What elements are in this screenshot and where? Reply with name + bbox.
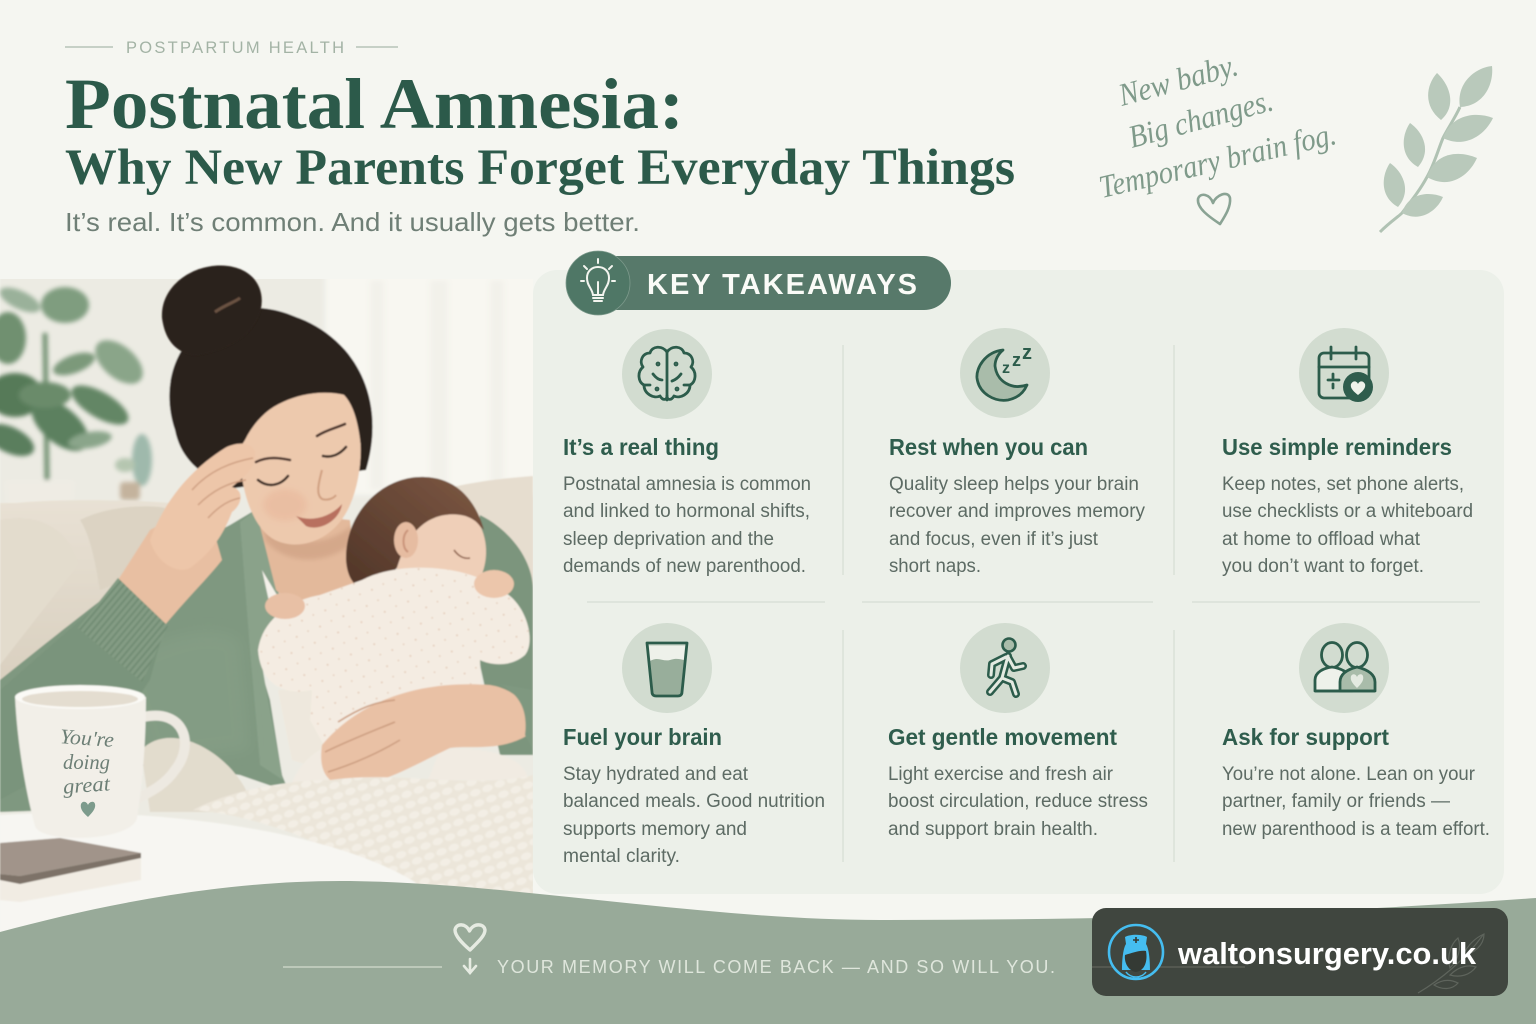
icon: small sprout arrow (464, 959, 476, 973)
icon: moon and zzz (977, 342, 1032, 400)
icon: moon and zzz: z (1012, 350, 1021, 370)
takeaway: Rest when you can: short naps. (889, 556, 981, 577)
takeaway: Ask for support: You’re not alone. Lean on your (1222, 764, 1476, 785)
heading pill (566, 251, 951, 315)
cardigan body (0, 506, 289, 812)
icon: brain (639, 347, 695, 400)
icon: two people (1315, 642, 1375, 691)
takeaway: Rest when you can: Rest when you can (889, 434, 1088, 460)
neck and chest (260, 518, 354, 600)
baby onesie (257, 567, 531, 670)
footer message (283, 925, 1055, 977)
takeaway: Fuel your brain: balanced meals. Good nutrition (563, 791, 825, 812)
handwritten note: New baby. (1114, 46, 1242, 113)
takeaway: Use simple reminders: Keep notes, set phone alerts, (1222, 474, 1464, 495)
takeaway: Use simple reminders: use checklists or a whiteboard (1222, 501, 1473, 522)
mug text (59, 724, 115, 817)
takeaway: Ask for support (1222, 623, 1490, 840)
icon: glass of water (647, 643, 687, 696)
takeaway: Fuel your brain: Fuel your brain (563, 724, 722, 750)
takeaway: Ask for support: Ask for support (1222, 724, 1389, 750)
takeaway: Ask for support: new parenthood is a team effort. (1222, 819, 1490, 840)
title: Postnatal Amnesia: (65, 64, 684, 144)
icon: moon and zzz: z (1002, 360, 1010, 377)
handwritten note: Big changes. (1124, 82, 1277, 155)
takeaway: Get gentle movement: Get gentle movement (888, 724, 1117, 750)
mug text: doing (63, 750, 110, 774)
photo: mother holding sleeping baby (0, 266, 540, 950)
mug handle (135, 716, 185, 800)
baby legs (500, 754, 502, 756)
takeaway: Rest when you can: Quality sleep helps your brain (889, 474, 1139, 495)
takeaway: Fuel your brain (563, 623, 825, 867)
handwritten note (1095, 46, 1339, 224)
takeaway: Use simple reminders: Use simple reminders (1222, 434, 1452, 460)
takeaway: Rest when you can: and focus, even if it’s just (889, 529, 1099, 550)
mug body (15, 697, 146, 838)
icon: mug heart (81, 802, 95, 817)
takeaway: Fuel your brain: mental clarity. (563, 846, 680, 867)
hair front (168, 307, 362, 470)
takeaway: Use simple reminders (1222, 328, 1473, 577)
takeaway: Rest when you can: recover and improves memory (889, 501, 1145, 522)
icon: faint leaf (1418, 934, 1484, 993)
plant (0, 283, 152, 512)
title (65, 64, 1015, 196)
icon: nurse logo (1109, 925, 1163, 979)
takeaway: It's a real thing (563, 329, 811, 577)
takeaway: It's a real thing: Postnatal amnesia is common (563, 474, 811, 495)
takeaway: Get gentle movement: boost circulation, reduce stress (888, 791, 1148, 812)
badge: waltonsurgery.co.uk: waltonsurgery.co.uk (1177, 936, 1477, 971)
eyebrow: postpartum health: POSTPARTUM HEALTH (126, 39, 344, 57)
footer wave (0, 881, 1536, 1024)
takeaway: Get gentle movement (888, 623, 1148, 840)
takeaway: It's a real thing: sleep deprivation and the (563, 529, 774, 550)
panel: key takeaways (533, 251, 1504, 894)
mug text: You're (59, 724, 115, 752)
bun above photo (162, 266, 262, 356)
subtitle: It’s real. It’s common. And it usually gets better. (65, 207, 640, 237)
icon: walking person (990, 638, 1023, 694)
takeaway: Ask for support: partner, family or friends — (1222, 791, 1450, 812)
takeaway: It's a real thing: and linked to hormonal shifts, (563, 501, 810, 522)
title: Why New Parents Forget Everyday Things (65, 140, 1015, 196)
icon: footer heart (455, 925, 485, 950)
mother's arm (321, 684, 529, 787)
sleeve and cuff (128, 657, 155, 692)
icon: light bulb (581, 259, 615, 301)
icon: leaf sprig (1380, 66, 1493, 232)
face (240, 393, 361, 545)
takeaway: Fuel your brain: supports memory and (563, 819, 747, 840)
mug text: great (62, 771, 112, 799)
takeaway: Get gentle movement: Light exercise and fresh air (888, 764, 1114, 785)
takeaway: Fuel your brain: Stay hydrated and eat (563, 764, 749, 785)
icon: moon and zzz: z (1022, 342, 1032, 364)
hair back (232, 317, 374, 489)
table (0, 814, 415, 932)
heading pill: KEY TAKEAWAYS (647, 269, 917, 301)
icon: calendar with heart (1319, 347, 1373, 402)
takeaway: Use simple reminders: at home to offload what (1222, 529, 1421, 550)
takeaway: It's a real thing: demands of new parenthood. (563, 556, 806, 577)
handwritten note: Temporary brain fog. (1095, 115, 1339, 205)
takeaway: It's a real thing: It’s a real thing (563, 434, 719, 460)
blanket (193, 775, 533, 900)
pillow (141, 738, 246, 812)
icon: handwritten heart (1198, 194, 1230, 224)
sofa (0, 503, 6, 505)
forearm and hand (118, 528, 223, 624)
baby head (346, 477, 484, 592)
badge: waltonsurgery.co.uk (1092, 908, 1508, 996)
book (0, 858, 141, 902)
footer message: YOUR MEMORY WILL COME BACK — AND SO WILL YOU. (497, 957, 1055, 977)
takeaway: Rest when you can (889, 328, 1145, 577)
takeaway: Get gentle movement: and support brain health. (888, 819, 1098, 840)
white top (262, 570, 277, 599)
takeaway: Use simple reminders: you don’t want to forget. (1222, 556, 1424, 577)
